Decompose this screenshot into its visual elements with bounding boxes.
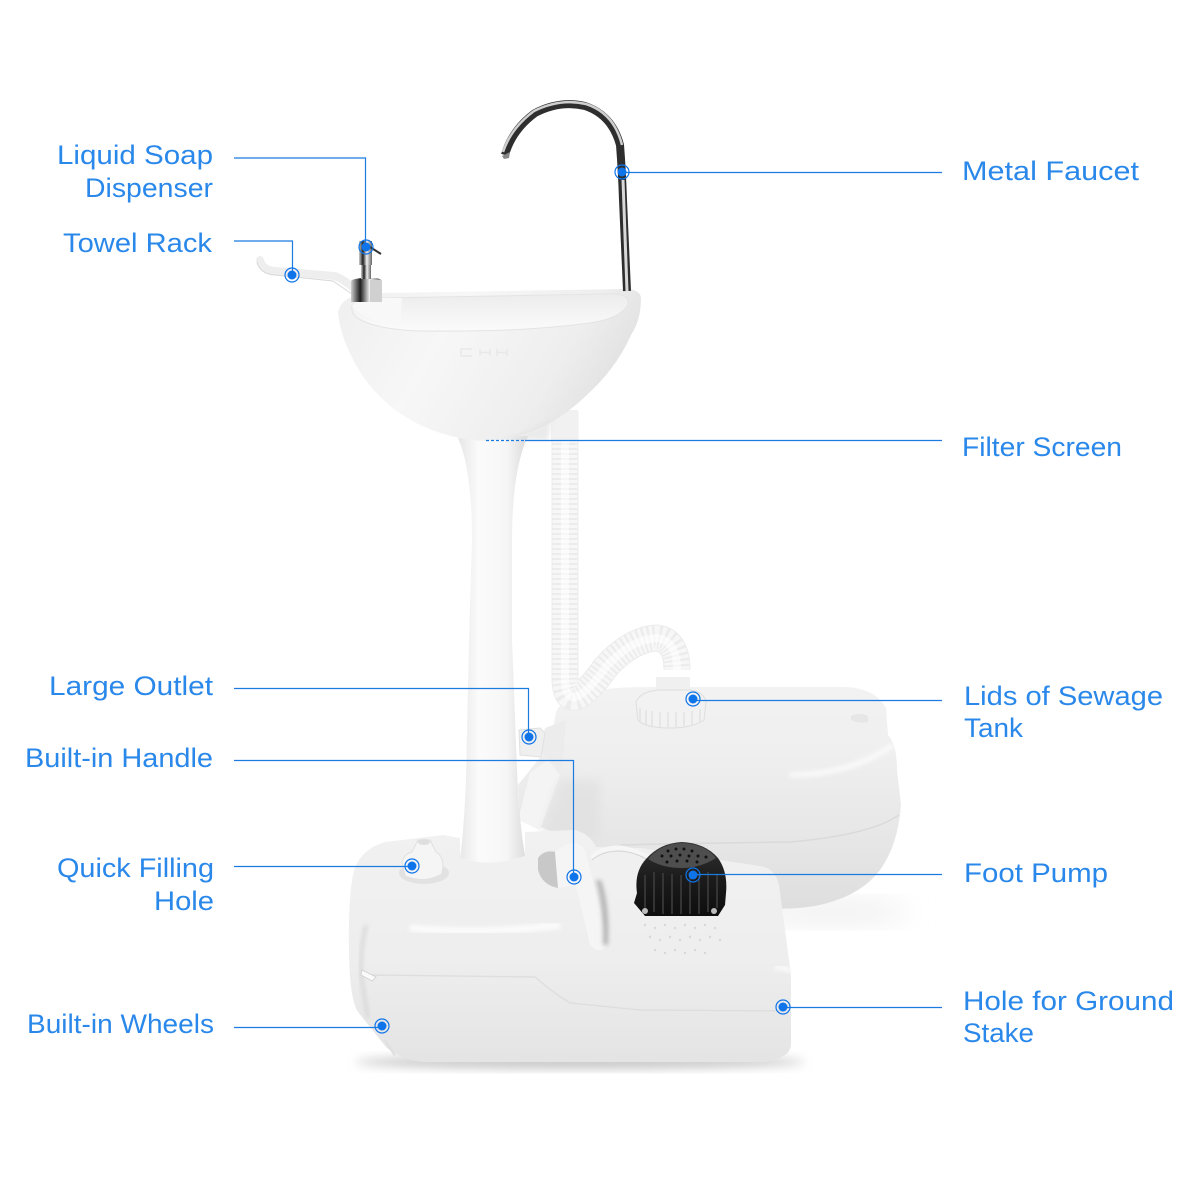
marker bbox=[776, 1000, 790, 1014]
leader line bbox=[622, 172, 942, 174]
towel rack bbox=[257, 260, 356, 294]
foot pump bbox=[634, 842, 726, 916]
label text bbox=[57, 140, 213, 203]
marker bbox=[522, 730, 536, 744]
perforated foot pad bbox=[644, 924, 721, 954]
leader line bbox=[234, 158, 366, 247]
marker bbox=[686, 868, 700, 882]
pump hose bbox=[592, 848, 650, 858]
label text: Hole bbox=[154, 886, 214, 916]
floor shadows bbox=[355, 905, 910, 1069]
callout: Hole for Ground Stake bbox=[776, 986, 1174, 1048]
label text: Quick Filling bbox=[57, 853, 214, 883]
dashed hidden section bbox=[486, 440, 525, 442]
label text bbox=[57, 853, 214, 916]
large outlet bbox=[519, 728, 545, 757]
label text: Filter Screen bbox=[962, 432, 1122, 462]
soap dispenser bbox=[351, 241, 382, 302]
front water tank bbox=[349, 830, 791, 1062]
leader line bbox=[234, 241, 292, 275]
marker bbox=[615, 165, 629, 179]
moulded logo bbox=[461, 349, 507, 356]
label text: Lids of Sewage bbox=[964, 681, 1163, 711]
leader line bbox=[525, 440, 942, 442]
top highlight bbox=[410, 925, 560, 931]
pump vent holes bbox=[660, 848, 708, 864]
callout: Quick Filling Hole bbox=[57, 853, 419, 916]
label text bbox=[963, 986, 1174, 1048]
label text: Dispenser bbox=[85, 173, 213, 203]
leader line bbox=[692, 700, 942, 702]
callout: Foot Pump bbox=[686, 858, 1108, 888]
label text: Towel Rack bbox=[63, 228, 213, 258]
callout: Liquid Soap Dispenser bbox=[57, 140, 373, 254]
carry handle channel bbox=[361, 925, 368, 1018]
callout: Metal Faucet bbox=[615, 156, 1140, 186]
leader line bbox=[234, 760, 574, 877]
marker bbox=[567, 870, 581, 884]
marker bbox=[686, 692, 700, 706]
marker bbox=[285, 268, 299, 282]
callout: Lids of Sewage Tank bbox=[686, 681, 1163, 743]
marker bbox=[405, 859, 419, 873]
label text: Liquid Soap bbox=[57, 140, 213, 170]
leader line bbox=[692, 874, 942, 876]
callout: Built-in Wheels bbox=[27, 1009, 389, 1039]
leader line bbox=[234, 1026, 382, 1028]
label text: Metal Faucet bbox=[962, 156, 1140, 186]
product photo: portable sink bbox=[257, 102, 910, 1069]
sink basin bbox=[338, 289, 641, 441]
label text bbox=[964, 681, 1163, 743]
leader line bbox=[234, 866, 412, 868]
label text: Large Outlet bbox=[49, 671, 214, 701]
label text: Stake bbox=[963, 1018, 1034, 1048]
label text: Built-in Handle bbox=[25, 743, 213, 773]
marker bbox=[375, 1019, 389, 1033]
handle recess bbox=[538, 851, 560, 888]
corrugated drain hose bbox=[551, 410, 677, 697]
label text: Hole for Ground bbox=[963, 986, 1174, 1016]
pedestal column bbox=[458, 436, 528, 863]
callout: Towel Rack bbox=[63, 228, 299, 282]
callout: Built-in Handle bbox=[25, 743, 581, 884]
sewage tank lid bbox=[636, 677, 706, 728]
leader line bbox=[783, 1006, 942, 1008]
quick filling hole cap bbox=[399, 839, 449, 884]
leader line bbox=[234, 688, 528, 737]
callout: Large Outlet bbox=[49, 671, 536, 744]
metal faucet bbox=[502, 102, 627, 291]
lower tank seam bbox=[372, 975, 785, 1011]
label text: Built-in Wheels bbox=[27, 1009, 214, 1039]
rear sewage tank bbox=[518, 687, 901, 909]
label text: Foot Pump bbox=[964, 858, 1108, 888]
label text: Tank bbox=[964, 713, 1024, 743]
marker bbox=[359, 240, 373, 254]
